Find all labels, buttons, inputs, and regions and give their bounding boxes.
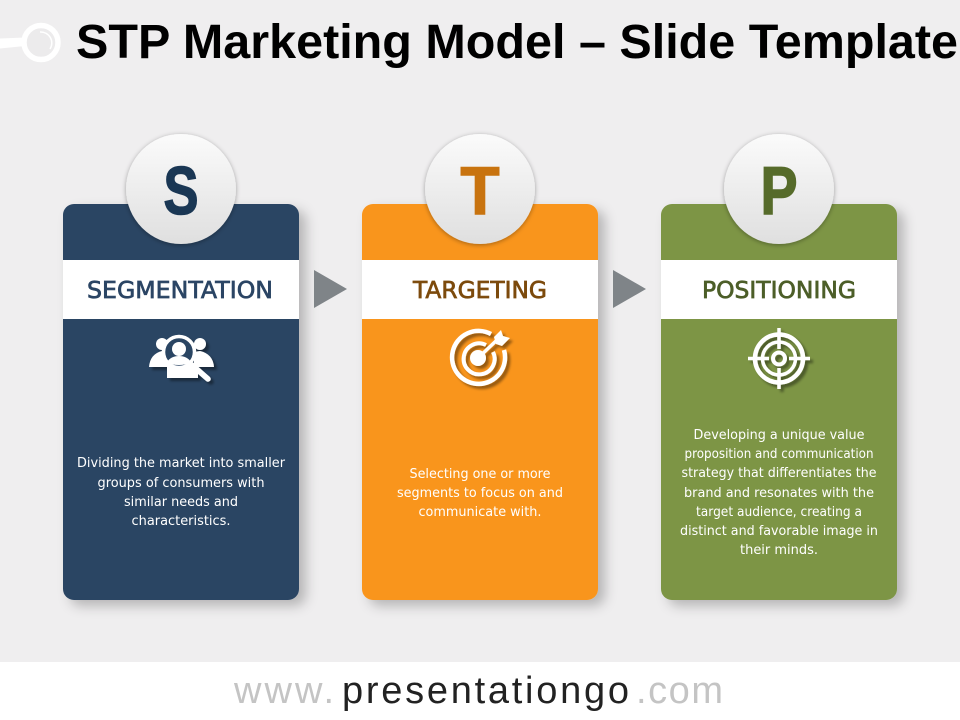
footer: www. (233, 670, 334, 712)
description: positioning: proposition and communication (684, 447, 874, 462)
panel: segmentation (63, 134, 299, 600)
letter circle: T: T (460, 153, 500, 229)
footer (0, 662, 960, 720)
footer: presentationgo (342, 670, 629, 712)
panel: positioning (661, 134, 897, 600)
letter circle: P (724, 134, 834, 244)
heading band: segmentation (63, 260, 299, 319)
description: targeting (397, 467, 563, 520)
icon: crosshair (748, 328, 810, 389)
heading band: positioning (661, 260, 897, 319)
icon: target with arrow (452, 330, 510, 384)
heading band: targeting (362, 260, 598, 319)
description: positioning: target audience, creating a (696, 505, 862, 520)
letter circle: P: P (760, 153, 798, 229)
description: segmentation (77, 456, 286, 529)
description: segmentation: groups of consumers with (98, 476, 264, 491)
description: positioning: brand and resonates with the (684, 486, 874, 501)
heading band: targeting: TARGETING (412, 278, 547, 304)
arrow: targeting to positioning (613, 270, 646, 308)
heading band: segmentation: SEGMENTATION (87, 278, 273, 304)
footer: .com (636, 670, 723, 712)
panel: targeting (362, 134, 598, 600)
description: positioning (680, 428, 878, 558)
arrow: segmentation to targeting (314, 270, 347, 308)
description: positioning: Developing a unique value (694, 428, 864, 443)
description: targeting: Selecting one or more (410, 467, 550, 482)
heading band: positioning: POSITIONING (702, 278, 856, 304)
description: segmentation: Dividing the market into smaller (77, 456, 286, 471)
description: segmentation: similar needs and (124, 495, 238, 510)
card background: positioning (661, 204, 897, 600)
letter circle: T (425, 134, 535, 244)
description: positioning: distinct and favorable image in (680, 524, 878, 539)
letter circle: S (126, 134, 236, 244)
description: positioning: their minds. (740, 543, 818, 558)
letter circle: S: S (164, 153, 198, 229)
icon: title ring (0, 26, 58, 60)
description: segmentation: characteristics. (132, 514, 230, 529)
card background: segmentation (63, 204, 299, 600)
card background: targeting (362, 204, 598, 600)
title: STP Marketing Model – Slide Template (76, 16, 958, 69)
description: targeting: segments to focus on and (397, 486, 563, 501)
description: targeting: communicate with. (418, 505, 542, 520)
description: positioning: strategy that differentiates the (682, 466, 876, 481)
icon: people with magnifier (149, 336, 214, 379)
